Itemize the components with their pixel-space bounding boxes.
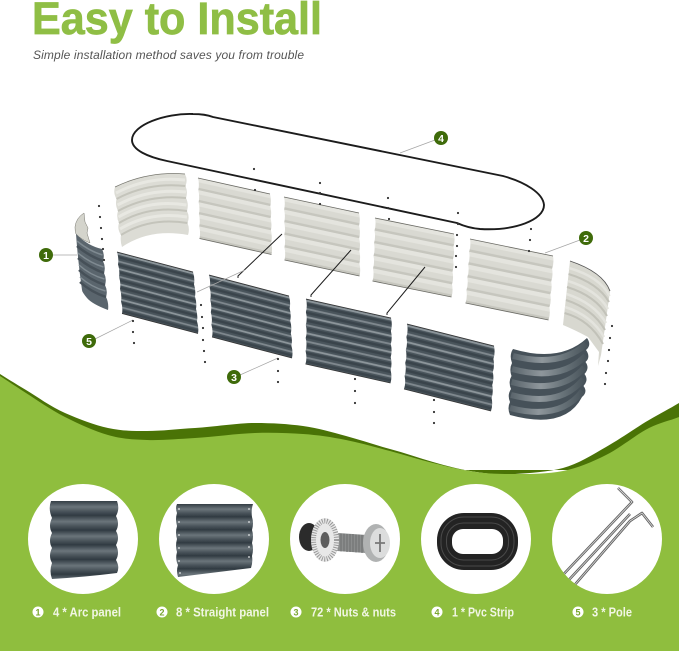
callout 3 [227,370,241,384]
label: arc panel: 1 [35,608,41,618]
exploded diagram [39,114,612,423]
leader lines [53,140,580,375]
callout 5: 5 [86,336,92,348]
label: straight panel: 8 * Straight panel [176,606,269,620]
light arc panel back left [114,174,189,247]
part: nuts and bolts [290,484,400,594]
label: poles: 3 * Pole [592,606,632,620]
label: pvc strip: 4 [434,608,440,618]
callout 2 [579,231,593,245]
label: arc panel: 4 * Arc panel [53,606,121,620]
label: pvc strip [432,606,514,620]
label: pvc strip: 1 * Pvc Strip [452,606,514,620]
subtitle: Simple installation method saves you from trouble [33,48,304,62]
screws [99,169,612,423]
part: arc panel [28,484,138,594]
poles [238,234,425,315]
green lower panel [0,376,679,651]
dark arc panel left [75,213,108,310]
callout 3: 3 [231,372,237,384]
dark arc panel front right [508,338,589,420]
callout 4 [434,131,448,145]
part: poles [552,484,662,594]
callout 1 [39,248,53,262]
callout 4: 4 [438,133,444,145]
callout 2: 2 [583,233,589,245]
callout 1: 1 [43,250,49,262]
light arc panel back right [563,261,610,366]
part: straight panel [159,484,269,594]
label: poles: 5 [575,608,581,618]
label: nuts and bolts: 72 * Nuts & nuts [311,606,396,620]
dark straight panels [117,252,495,411]
label: nuts and bolts: 3 [293,608,299,618]
part: pvc strip [421,484,531,594]
label: straight panel: 2 [159,608,165,618]
label: poles [572,606,632,620]
callout 5 [82,334,96,348]
pvc strip [132,114,544,229]
wave: dark green edge [0,374,679,474]
light straight panels [198,178,554,320]
